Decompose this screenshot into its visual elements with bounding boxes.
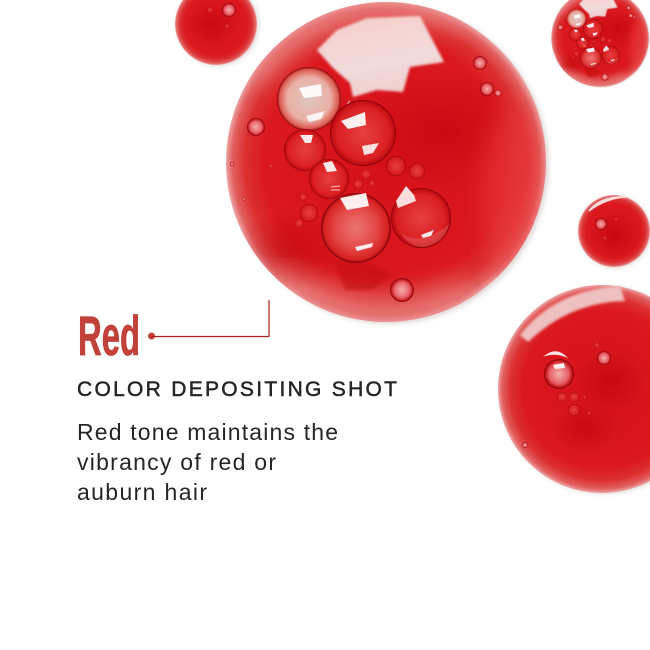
label: Red: Red <box>78 304 140 367</box>
droplet: top right <box>551 0 650 87</box>
body text <box>77 419 338 505</box>
droplet: large central serum drop <box>226 2 549 324</box>
droplet: top left <box>175 0 259 66</box>
callout leader line <box>148 300 269 340</box>
body text: vibrancy of red or <box>77 449 276 475</box>
infographic canvas <box>77 0 650 500</box>
droplet: lower right <box>498 285 650 494</box>
heading: COLOR DEPOSITING SHOT <box>77 378 397 401</box>
droplet: middle right <box>578 195 650 268</box>
body text: Red tone maintains the <box>77 419 338 445</box>
body text: auburn hair <box>77 479 207 505</box>
